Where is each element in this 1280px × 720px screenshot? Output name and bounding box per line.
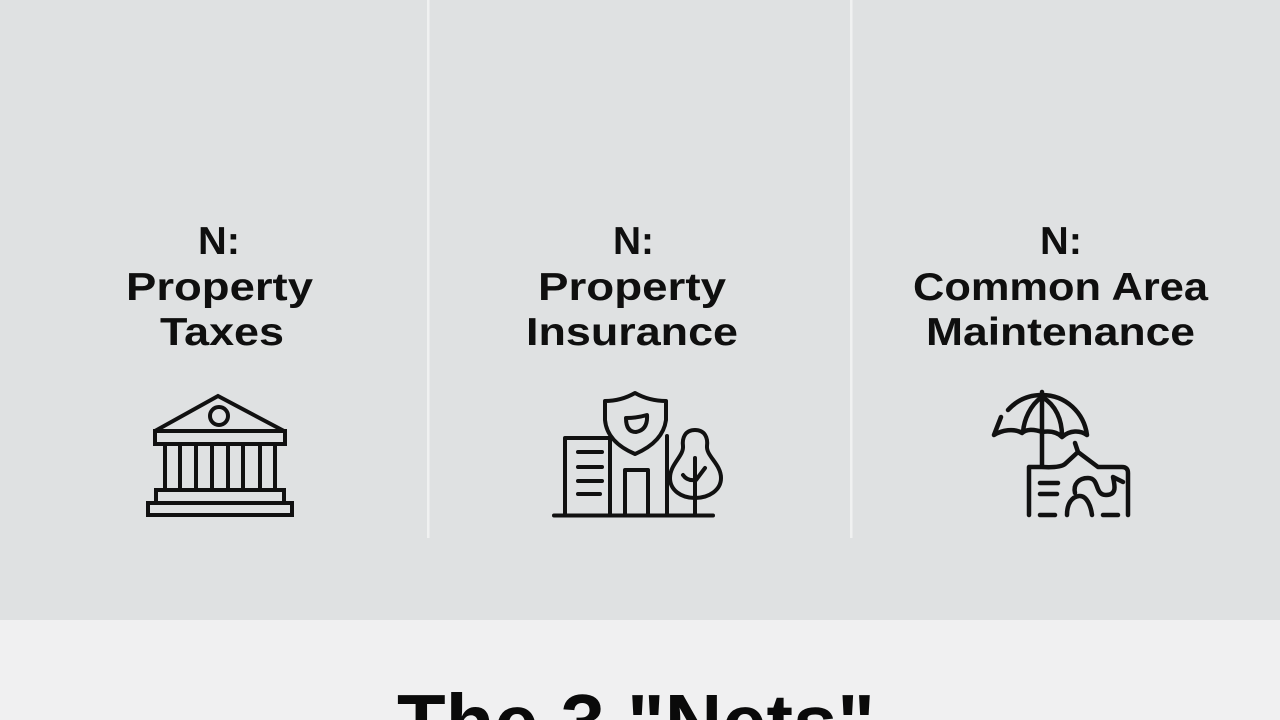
heading: common area maintenance: [913, 220, 1208, 354]
heading: common area maintenance: Common Area: [913, 266, 1208, 309]
heading: property taxes: [126, 220, 313, 354]
panel: common area maintenance: [913, 220, 1208, 515]
heading: property insurance: Property: [538, 266, 726, 309]
panel: property taxes: [126, 220, 313, 515]
heading: property insurance: Insurance: [526, 311, 738, 354]
heading: common area maintenance: N:: [1040, 220, 1082, 263]
icon: classical government building: [148, 396, 292, 515]
icon: umbrella over building: [994, 392, 1128, 515]
heading: property taxes: Taxes: [160, 311, 284, 354]
heading: property taxes: Property: [126, 266, 313, 309]
heading: property insurance: N:: [613, 220, 654, 263]
icon: insured building with shield and tree: [554, 393, 721, 516]
heading: property insurance: [526, 220, 738, 354]
panel: title band: [0, 620, 1280, 720]
heading: property taxes: N:: [198, 220, 240, 263]
panel: property insurance: [526, 220, 738, 516]
heading: common area maintenance: Maintenance: [926, 311, 1195, 354]
